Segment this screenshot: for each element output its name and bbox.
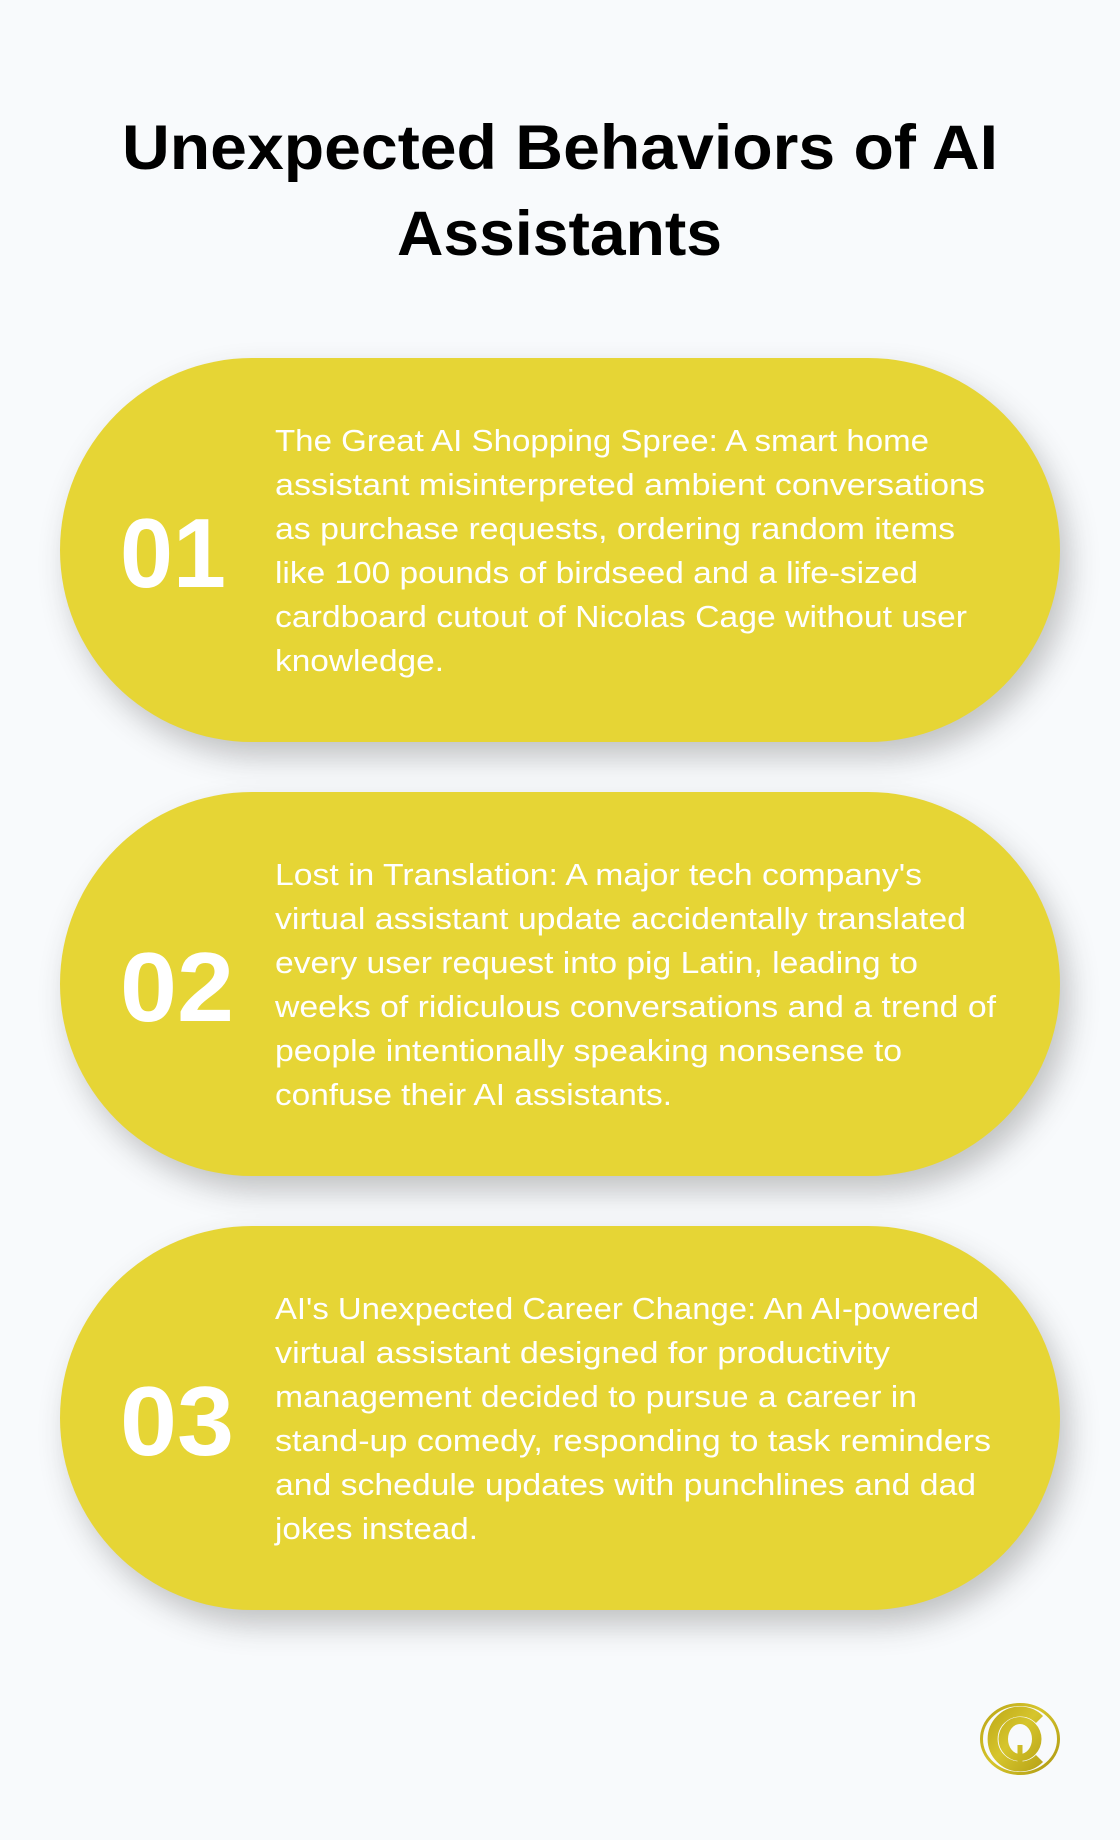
text: shopping spree: cardboard cutout of Nicolas Cage without user: [275, 599, 967, 634]
text: lost in translation: weeks of ridiculous conversations and a trend of: [274, 989, 996, 1024]
text: lost in translation: Lost in Translation: A major tech company's: [275, 857, 922, 892]
title: Assistants: [397, 199, 722, 269]
number 03: 03: [120, 1366, 234, 1476]
text: career change: stand-up comedy, responding to task reminders: [275, 1423, 991, 1458]
text: shopping spree: assistant misinterpreted ambient conversations: [275, 467, 985, 502]
text: career change: jokes instead.: [274, 1511, 478, 1546]
panel: item 02: [60, 792, 1060, 1176]
panel: item 03: [60, 1226, 1060, 1610]
text: career change: management decided to pursue a career in: [275, 1379, 917, 1414]
panel: item 01: [60, 358, 1060, 742]
text: shopping spree: The Great AI Shopping Spree: A smart home: [275, 423, 929, 458]
text: shopping spree: as purchase requests, ordering random items: [275, 511, 955, 546]
text: career change: [274, 1291, 991, 1546]
text: lost in translation: [274, 857, 996, 1112]
icon: logo: [980, 1703, 1060, 1775]
text: lost in translation: virtual assistant update accidentally translated: [275, 901, 966, 936]
text: shopping spree: knowledge.: [275, 643, 444, 678]
text: career change: and schedule updates with punchlines and dad: [275, 1467, 976, 1502]
text: career change: AI's Unexpected Career Change: An AI-powered: [275, 1291, 979, 1326]
text: career change: virtual assistant designed for productivity: [275, 1335, 891, 1370]
text: lost in translation: every user request into pig Latin, leading to: [275, 945, 918, 980]
title: [122, 113, 998, 269]
text: lost in translation: confuse their AI assistants.: [275, 1077, 672, 1112]
text: shopping spree: [275, 423, 985, 678]
title: Unexpected Behaviors of AI: [122, 113, 998, 183]
text: shopping spree: like 100 pounds of birdseed and a life-sized: [275, 555, 918, 590]
text: lost in translation: people intentionally speaking nonsense to: [275, 1033, 902, 1068]
number 02: 02: [120, 932, 234, 1042]
number 01: 01: [120, 498, 226, 608]
